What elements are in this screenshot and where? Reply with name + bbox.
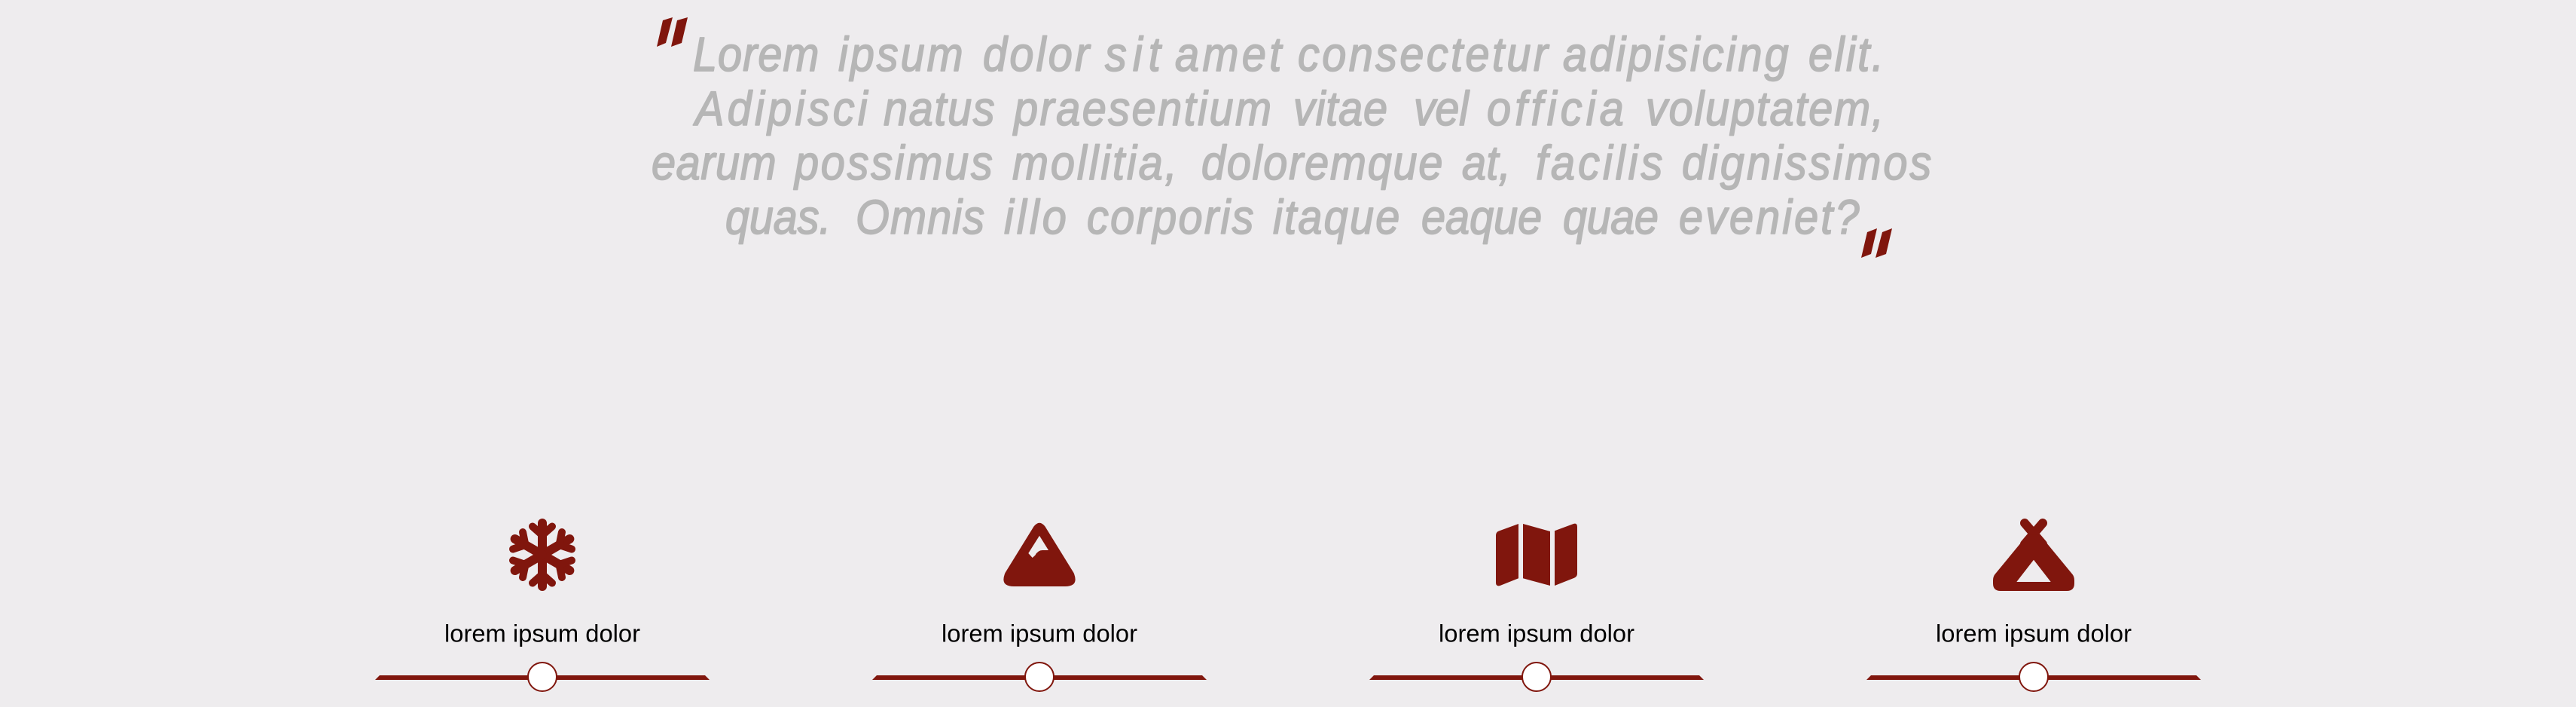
quote line 4: Omnis [856, 190, 984, 244]
quote line 3: dignissimos [1682, 136, 1931, 190]
quote line 3: possimus [793, 136, 993, 190]
quote line 1: dolor [983, 27, 1091, 81]
label: lorem ipsum dolor: lorem ipsum dolor [1439, 620, 1634, 647]
quote line 3: doloremque [1201, 136, 1442, 190]
icon: folded map [1496, 524, 1577, 586]
quote line 4: corporis [1087, 190, 1253, 244]
icon: mountain [1003, 523, 1076, 586]
icon: opening quotation mark [657, 17, 688, 47]
quote line 1 [693, 27, 1884, 81]
icon: snowflake [513, 523, 572, 586]
quote line 1: consectetur [1298, 27, 1550, 81]
quote line 2 [693, 81, 1884, 136]
slider [375, 663, 710, 691]
quote line 2: officia [1487, 81, 1624, 136]
quote text block [652, 27, 1931, 244]
label: lorem ipsum dolor: lorem ipsum dolor [1936, 620, 2132, 647]
slider [1866, 663, 2201, 691]
quote line 4: illo [1004, 190, 1067, 244]
quote line 2: natus [884, 81, 995, 136]
quote line 1: elit. [1808, 27, 1884, 81]
quote line 3: facilis [1536, 136, 1662, 190]
panel: snowflake item [375, 523, 710, 691]
label: lorem ipsum dolor: lorem ipsum dolor [444, 620, 640, 647]
quote line 1: amet [1175, 27, 1283, 81]
icon: tent [1993, 523, 2074, 591]
quote line 3: earum [652, 136, 777, 190]
slider [1369, 663, 1704, 691]
quote line 4: eveniet? [1679, 190, 1860, 244]
quote line 2: Adipisci [693, 81, 868, 136]
quote line 1: adipisicing [1563, 27, 1789, 81]
quote line 4: eaque [1421, 190, 1542, 244]
icon: closing quotation mark [1861, 228, 1892, 258]
quote line 2: vel [1414, 81, 1470, 136]
quote line 2: praesentium [1012, 81, 1271, 136]
quote line 1: sit [1105, 27, 1163, 81]
quote line 4: itaque [1273, 190, 1399, 244]
panel: mountain item [872, 523, 1207, 691]
panel: map item [1369, 524, 1704, 691]
quote line 4: quas. [725, 190, 831, 244]
quote line 4 [725, 190, 1860, 244]
quote line 3: mollitia, [1012, 136, 1177, 190]
quote line 1: ipsum [838, 27, 963, 81]
quote line 3: at, [1462, 136, 1511, 190]
label: lorem ipsum dolor: lorem ipsum dolor [942, 620, 1137, 647]
panel: tent item [1866, 523, 2201, 691]
quote line 2: vitae [1293, 81, 1387, 136]
quote line 4: quae [1563, 190, 1659, 244]
quote line 1: Lorem [693, 27, 819, 81]
slider [872, 663, 1207, 691]
quote line 3 [652, 136, 1931, 190]
quote line 2: voluptatem, [1646, 81, 1884, 136]
